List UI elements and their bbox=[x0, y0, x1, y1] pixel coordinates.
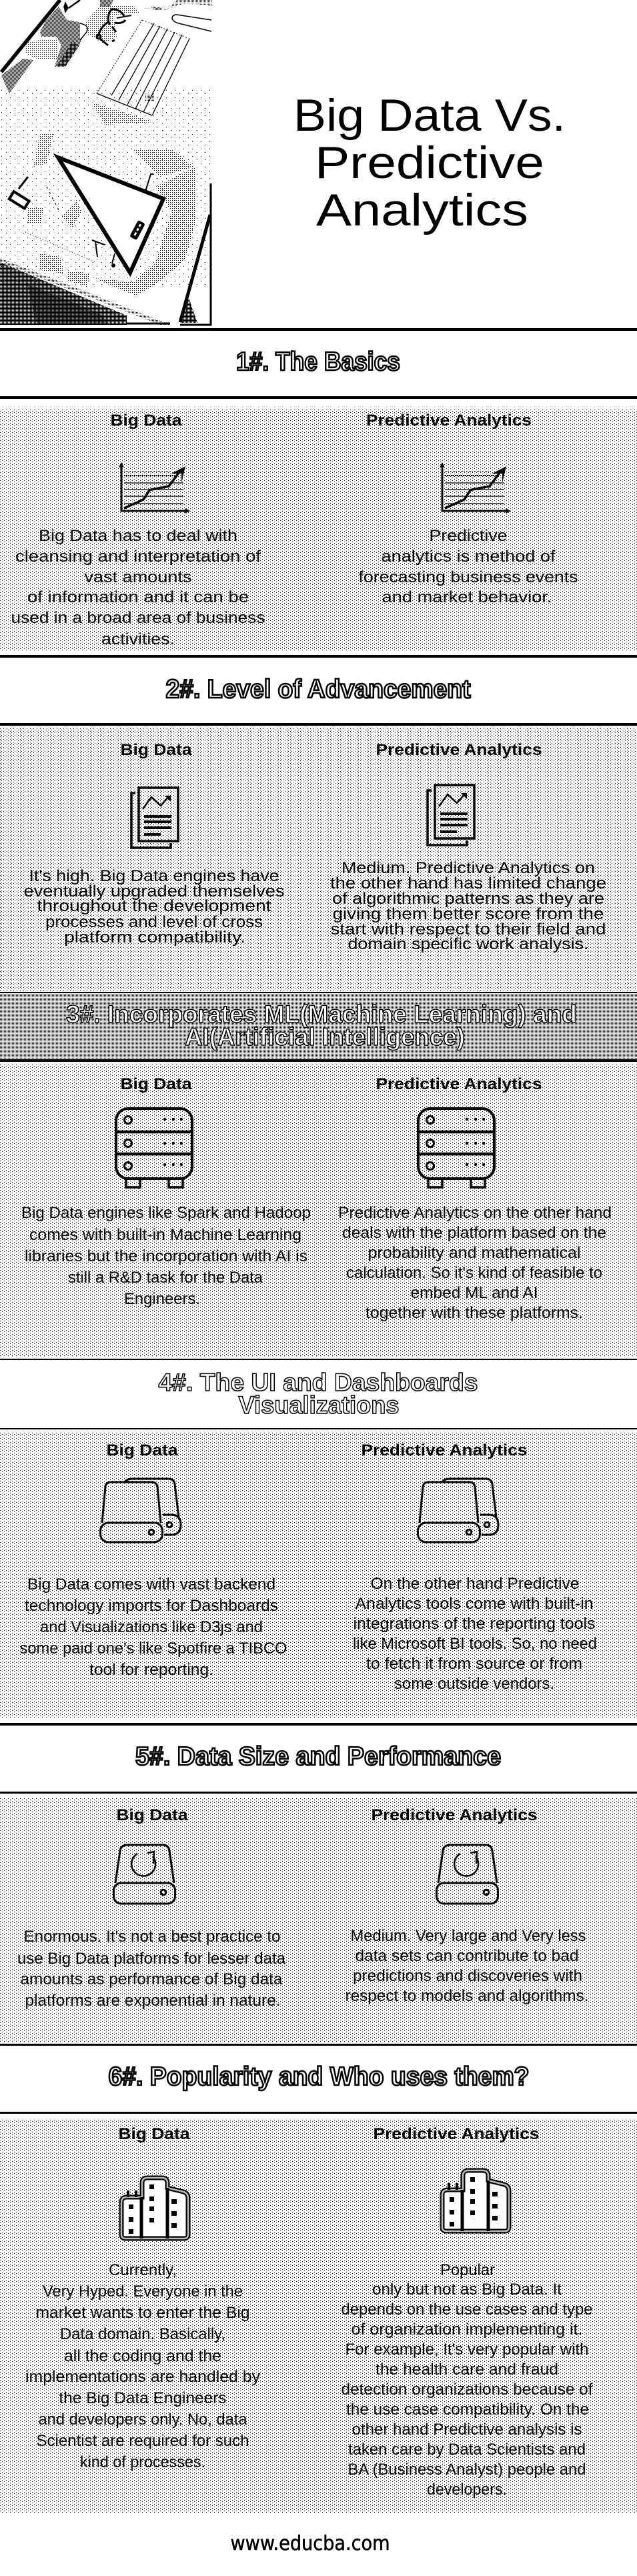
icon: backup drive right bbox=[436, 1845, 498, 1904]
icon: growth chart right bbox=[440, 463, 510, 513]
text: Predictive Analytics size bbox=[346, 1927, 588, 2005]
column heading: Big Data: Big Data bbox=[116, 1806, 188, 1824]
text: Big Data size: amounts as performance of Big data bbox=[20, 1970, 283, 1988]
heading: section 5 band bbox=[0, 1723, 637, 1794]
text: Big Data popularity: all the coding and the bbox=[64, 2347, 221, 2365]
text: Big Data popularity: Very Hyped. Everyone in the bbox=[43, 2283, 243, 2301]
title: Predictive bbox=[315, 137, 544, 188]
column heading: Big Data: Big Data bbox=[107, 1441, 178, 1459]
text: Predictive Analytics ML and AI: embed ML and AI bbox=[411, 1284, 538, 1302]
column heading: Predictive Analytics: Predictive Analytics bbox=[371, 1806, 538, 1824]
text: Predictive Analytics popularity: only but not as Big Data. It bbox=[372, 2281, 562, 2299]
text: Big Data advancement: eventually upgraded themselves bbox=[24, 882, 284, 900]
text: Predictive Analytics size: respect to models and algorithms. bbox=[346, 1987, 588, 2005]
text: Predictive Analytics advancement: of algorithmic patterns as they are bbox=[332, 890, 604, 908]
text: Predictive Analytics ML and AI: deals with the platform based on the bbox=[342, 1224, 606, 1242]
text: Big Data popularity bbox=[25, 2261, 260, 2471]
panel: section 1 the basics bbox=[0, 409, 637, 650]
text: Big Data ML and AI: libraries but the incorporation with AI is bbox=[25, 1247, 307, 1265]
heading: section 4 band: 4#. The UI and Dashboards bbox=[159, 1369, 478, 1396]
text: Predictive Analytics size: predictions and discoveries with bbox=[353, 1967, 582, 1985]
text: Predictive Analytics size: Medium. Very large and Very less bbox=[351, 1927, 586, 1945]
text: Predictive Analytics popularity: Popular bbox=[440, 2261, 495, 2279]
text: Predictive Analytics dashboards: to fetch it from source or from bbox=[366, 1655, 582, 1673]
column heading: Predictive Analytics: Predictive Analytics bbox=[362, 1441, 527, 1459]
text: Big Data ML and AI: Big Data engines like Spark and Hadoop bbox=[21, 1204, 311, 1222]
text: Predictive Analytics basics: and market behavior. bbox=[382, 588, 552, 606]
text: Big Data basics: cleansing and interpretation of bbox=[15, 548, 261, 566]
text: Predictive Analytics advancement: Medium. Predictive Analytics on bbox=[342, 859, 595, 877]
image: desk photo with set square, glasses and notebook bbox=[0, 0, 211, 325]
text: Predictive Analytics popularity: taken care by Data Scientists and bbox=[348, 2441, 586, 2459]
text: Predictive Analytics ML and AI bbox=[338, 1204, 612, 1322]
text: Predictive Analytics advancement: the other hand has limited change bbox=[330, 874, 606, 892]
text: Big Data basics: activities. bbox=[101, 630, 175, 648]
text: Predictive Analytics ML and AI: together with these platforms. bbox=[366, 1304, 583, 1322]
icon: hard drives left bbox=[100, 1479, 181, 1542]
text: Predictive Analytics popularity: developers. bbox=[427, 2481, 507, 2499]
text: Big Data dashboards: technology imports for Dashboards bbox=[25, 1597, 278, 1615]
column heading: Predictive Analytics: Predictive Analytics bbox=[366, 412, 532, 430]
heading: section 3 gray band bbox=[0, 992, 637, 1062]
text: Big Data popularity: Scientist are required for such bbox=[36, 2432, 249, 2450]
text: Big Data popularity: market wants to enter the Big bbox=[36, 2304, 249, 2322]
text: Big Data size: platforms are exponential in nature. bbox=[25, 1992, 281, 2010]
text: Big Data size: use Big Data platforms for lesser data bbox=[17, 1950, 286, 1968]
text: Predictive Analytics popularity: depends on the use cases and type bbox=[342, 2301, 592, 2319]
text: Big Data advancement: platform compatibility. bbox=[64, 928, 245, 946]
text: Predictive Analytics popularity: of organization implementing it. bbox=[351, 2321, 583, 2339]
text: Big Data popularity: Data domain. Basically, bbox=[60, 2325, 225, 2343]
text: Predictive Analytics popularity bbox=[342, 2261, 593, 2499]
text: Big Data dashboards: Big Data comes with vast backend bbox=[27, 1575, 275, 1593]
text: Big Data basics: of information and it can be bbox=[27, 588, 249, 606]
text: Big Data dashboards bbox=[20, 1575, 287, 1679]
text: Big Data popularity: implementations are handled by bbox=[25, 2368, 260, 2386]
heading: section 2 band: 2#. Level of Advancement bbox=[165, 675, 471, 704]
column heading: Predictive Analytics: Predictive Analytics bbox=[376, 741, 542, 759]
text: Big Data size: Enormous. It's not a best practice to bbox=[24, 1928, 280, 1946]
icon: city buildings left bbox=[121, 2178, 188, 2238]
text: Big Data popularity: kind of processes. bbox=[80, 2453, 205, 2471]
text: Big Data basics bbox=[11, 527, 265, 648]
text: Predictive Analytics popularity: BA (Business Analyst) people and bbox=[348, 2461, 586, 2479]
text: Predictive Analytics dashboards: some outside vendors. bbox=[394, 1675, 554, 1693]
panel: section 2 level of advancement bbox=[0, 728, 637, 991]
text: Predictive Analytics basics: Predictive bbox=[430, 527, 507, 545]
column heading: Big Data: Big Data bbox=[120, 741, 192, 759]
heading: section 1 band bbox=[0, 328, 637, 399]
text: Predictive Analytics popularity: For example, It's very popular with bbox=[346, 2341, 588, 2359]
text: Predictive Analytics dashboards: Analytics tools come with built-in bbox=[355, 1595, 594, 1613]
icon: backup drive left bbox=[113, 1845, 175, 1904]
text: Big Data popularity: the Big Data Engineers bbox=[59, 2389, 227, 2407]
panel: section 5 data size and performance bbox=[0, 1798, 637, 2042]
text: Predictive Analytics ML and AI: Predictive Analytics on the other hand bbox=[338, 1204, 612, 1222]
text: Big Data ML and AI: Engineers. bbox=[124, 1290, 200, 1308]
text: Big Data dashboards: and Visualizations like D3js and bbox=[40, 1618, 263, 1636]
heading: section 5 band: 5#. Data Size and Performance bbox=[135, 1742, 501, 1771]
text: Predictive Analytics advancement: giving them better score from the bbox=[332, 905, 604, 923]
text: Predictive Analytics popularity: the use case compatibility. On the bbox=[346, 2401, 589, 2419]
column heading: Big Data: Big Data bbox=[120, 1075, 192, 1093]
heading: section 6 band: 6#. Popularity and Who uses them? bbox=[108, 2062, 530, 2091]
text: Big Data basics: Big Data has to deal with bbox=[39, 527, 237, 545]
text: Big Data popularity: Currently, bbox=[109, 2261, 177, 2279]
column heading: Big Data: Big Data bbox=[111, 412, 182, 430]
text: Predictive Analytics ML and AI: probability and mathematical bbox=[368, 1244, 580, 1262]
text: Big Data advancement: processes and level of cross bbox=[45, 913, 263, 931]
heading: section 3 gray band: 3#. Incorporates ML(Machine Learning) and bbox=[66, 1001, 577, 1028]
text: Predictive Analytics popularity: the health care and fraud bbox=[376, 2361, 558, 2379]
text: Predictive Analytics dashboards bbox=[353, 1575, 597, 1693]
text: Predictive Analytics ML and AI: calculation. So it's kind of feasible to bbox=[346, 1264, 602, 1282]
icon: server rack right bbox=[418, 1109, 494, 1187]
title: Analytics bbox=[316, 185, 528, 235]
panel: section 4 UI and dashboards bbox=[0, 1432, 637, 1718]
icon: growth chart left bbox=[119, 463, 189, 513]
text: Predictive Analytics basics: analytics is method of bbox=[382, 548, 556, 566]
text: Big Data dashboards: tool for reporting. bbox=[89, 1661, 213, 1679]
heading: section 1 band: 1#. The Basics bbox=[236, 348, 400, 376]
icon: report document left bbox=[131, 788, 178, 848]
text: Predictive Analytics advancement: domain specific work analysis. bbox=[348, 935, 588, 953]
text: Big Data size bbox=[17, 1928, 286, 2010]
text: Predictive Analytics popularity: other hand Predictive analysis is bbox=[352, 2421, 582, 2439]
text: Predictive Analytics basics bbox=[359, 527, 578, 606]
icon: hard drives right bbox=[418, 1479, 498, 1542]
text: Big Data advancement bbox=[24, 867, 284, 946]
text: Predictive Analytics dashboards: integrations of the reporting tools bbox=[354, 1615, 595, 1633]
text: Big Data popularity: and developers only. No, data bbox=[39, 2411, 247, 2429]
text: Predictive Analytics popularity: detection organizations because of bbox=[342, 2381, 593, 2399]
heading: section 2 band bbox=[0, 655, 637, 726]
column heading: Predictive Analytics: Predictive Analytics bbox=[374, 2125, 539, 2143]
heading: section 6 band bbox=[0, 2044, 637, 2114]
title bbox=[293, 90, 566, 235]
text: Big Data advancement: throughout the development bbox=[37, 897, 271, 915]
panel: section 3 ML and AI bbox=[0, 1065, 637, 1356]
text: Big Data advancement: It's high. Big Data engines have bbox=[29, 867, 279, 885]
text: Predictive Analytics advancement: start with respect to their field and bbox=[331, 920, 606, 938]
column heading: Big Data: Big Data bbox=[119, 2125, 190, 2143]
footer: website: www.educba.com bbox=[231, 2532, 390, 2555]
icon: report document right bbox=[428, 785, 474, 845]
heading: section 3 gray band: AI(Artificial Intelligence) bbox=[185, 1023, 465, 1051]
text: Big Data ML and AI: still a R&D task for the Data bbox=[68, 1269, 263, 1287]
icon: city buildings right bbox=[442, 2170, 509, 2231]
column heading: Predictive Analytics: Predictive Analytics bbox=[376, 1075, 542, 1093]
heading: section 4 band bbox=[0, 1359, 637, 1429]
text: Big Data basics: vast amounts bbox=[84, 568, 192, 586]
text: Big Data ML and AI: comes with built-in Machine Learning bbox=[29, 1226, 301, 1244]
heading: section 4 band: Visualizations bbox=[239, 1391, 399, 1419]
text: Predictive Analytics advancement bbox=[330, 859, 606, 953]
text: Big Data ML and AI bbox=[21, 1204, 311, 1308]
text: Predictive Analytics size: data sets can contribute to bad bbox=[355, 1947, 579, 1965]
panel: section 6 popularity bbox=[0, 2120, 637, 2513]
text: Predictive Analytics basics: forecasting business events bbox=[359, 568, 578, 586]
text: Big Data dashboards: some paid one's like Spotfire a TIBCO bbox=[20, 1640, 287, 1658]
title: Big Data Vs. bbox=[293, 90, 566, 141]
text: Predictive Analytics dashboards: On the other hand Predictive bbox=[371, 1575, 579, 1593]
text: Big Data basics: used in a broad area of business bbox=[11, 609, 265, 627]
text: Predictive Analytics dashboards: like Microsoft BI tools. So, no need bbox=[353, 1635, 597, 1653]
icon: server rack left bbox=[116, 1109, 192, 1187]
